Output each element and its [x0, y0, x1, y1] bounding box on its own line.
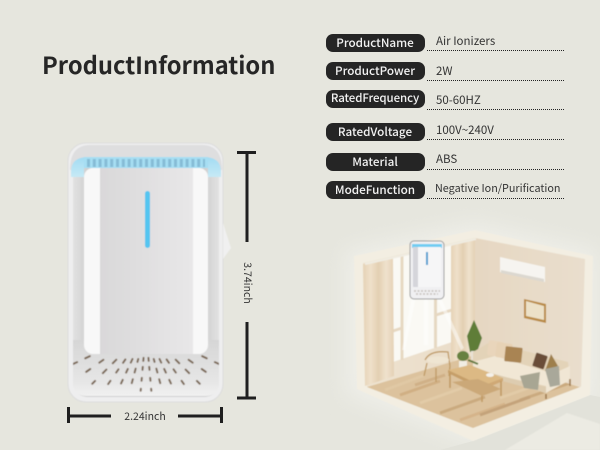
inner tray — [73, 157, 219, 397]
device illustration — [68, 143, 231, 402]
value: product name — [427, 34, 564, 51]
wall picture — [524, 299, 546, 323]
grille slots — [73, 356, 219, 391]
value: product power — [427, 62, 564, 81]
value: product name: Air Ionizers — [436, 33, 495, 49]
curtain rod — [365, 239, 476, 264]
value: rated voltage: 100V~240V — [436, 122, 494, 138]
right curtain — [451, 240, 475, 364]
title: ProductInformation — [42, 47, 275, 81]
right wall — [475, 238, 585, 387]
floor light patch — [505, 413, 600, 450]
left wall — [363, 238, 475, 387]
window frame — [393, 248, 452, 360]
air conditioner — [500, 257, 545, 282]
value: rated frequency — [427, 90, 564, 110]
floor — [367, 355, 580, 428]
room illustration — [362, 238, 586, 428]
value: rated voltage — [427, 123, 564, 140]
side button — [223, 223, 231, 259]
front panel — [84, 168, 208, 354]
LED indicator — [145, 191, 150, 248]
top vent slots — [87, 159, 205, 167]
potted plant — [457, 351, 478, 370]
width label: 2.24inch — [124, 409, 166, 424]
background glow — [345, 222, 598, 445]
chair — [424, 352, 450, 382]
device shell — [68, 143, 223, 402]
sofa — [473, 340, 570, 399]
coffee table — [448, 365, 503, 402]
plant — [467, 320, 482, 360]
value: material — [427, 153, 564, 170]
value: material: ABS — [436, 151, 457, 167]
grille base — [73, 340, 219, 396]
top cap — [70, 145, 222, 170]
label: product power: ProductPower — [335, 62, 415, 79]
panel face — [100, 168, 193, 354]
label: product name: ProductName — [336, 34, 414, 51]
label: rated voltage: RatedVoltage — [338, 123, 412, 140]
floor planks — [400, 374, 570, 421]
height dimension — [237, 152, 256, 398]
label: mode function: ModeFunction — [335, 181, 415, 198]
width dimension — [68, 407, 222, 423]
blue light band — [71, 157, 221, 177]
value: rated frequency: 50-60HZ — [436, 92, 481, 108]
value: mode function: Negative Ion/Purification — [435, 180, 561, 196]
window — [393, 245, 452, 362]
value: product power: 2W — [436, 63, 452, 79]
outer room shell — [354, 230, 593, 441]
label: rated frequency: RatedFrequency — [331, 90, 419, 106]
label: material — [326, 153, 425, 171]
mini device — [410, 241, 444, 299]
air streams — [402, 296, 464, 350]
floor shadow area — [440, 395, 600, 450]
left curtain — [363, 258, 394, 386]
height label: 3.74inch — [240, 262, 255, 304]
spec table — [326, 33, 564, 199]
label: material: Material — [352, 153, 398, 170]
